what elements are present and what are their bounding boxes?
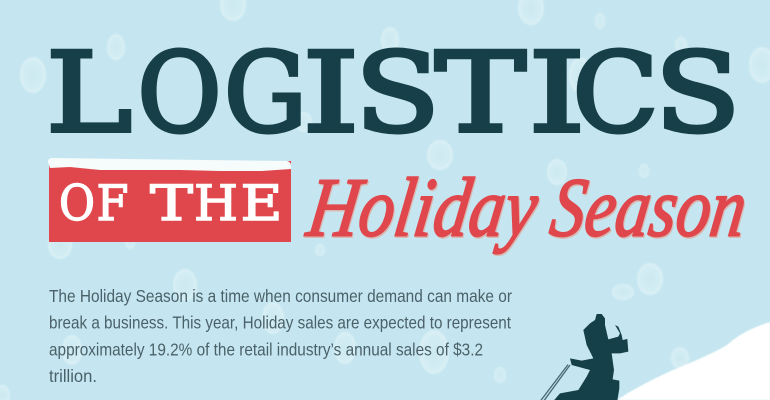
banner text: F: [96, 175, 128, 232]
title: LOGISTICS: I: [528, 29, 585, 157]
title: LOGISTICS: I: [302, 29, 359, 157]
icon: sledder silhouette: [541, 314, 628, 400]
banner text: [59, 175, 282, 232]
intro text: [49, 286, 512, 386]
snow hill: [617, 322, 770, 400]
intro text: The Holiday Season is a time when consumer demand can make or: [49, 286, 512, 306]
title: LOGISTICS: S: [655, 29, 741, 157]
title: LOGISTICS: [46, 29, 741, 157]
banner text: T: [150, 175, 193, 232]
title: LOGISTICS: T: [435, 29, 526, 157]
title: LOGISTICS: S: [355, 29, 440, 157]
heading: Holiday Season: Holiday: [303, 163, 545, 256]
banner: OF THE: [48, 158, 291, 242]
title: LOGISTICS: O: [138, 29, 222, 157]
snow cap: [48, 158, 291, 171]
title: LOGISTICS: C: [572, 29, 658, 157]
intro text: break a business. This year, Holiday sales are expected to represent: [49, 312, 511, 332]
heading: Holiday Season: Holiday: [302, 162, 544, 254]
banner text: H: [194, 175, 238, 232]
banner text: O: [59, 175, 95, 232]
title: LOGISTICS: L: [46, 29, 132, 157]
banner text: E: [240, 175, 282, 232]
intro text: approximately 19.2% of the retail industry’s annual sales of $3.2: [49, 340, 483, 360]
heading: Holiday Season: [302, 162, 753, 256]
title: LOGISTICS: G: [224, 29, 307, 157]
intro text: trillion.: [49, 366, 97, 386]
